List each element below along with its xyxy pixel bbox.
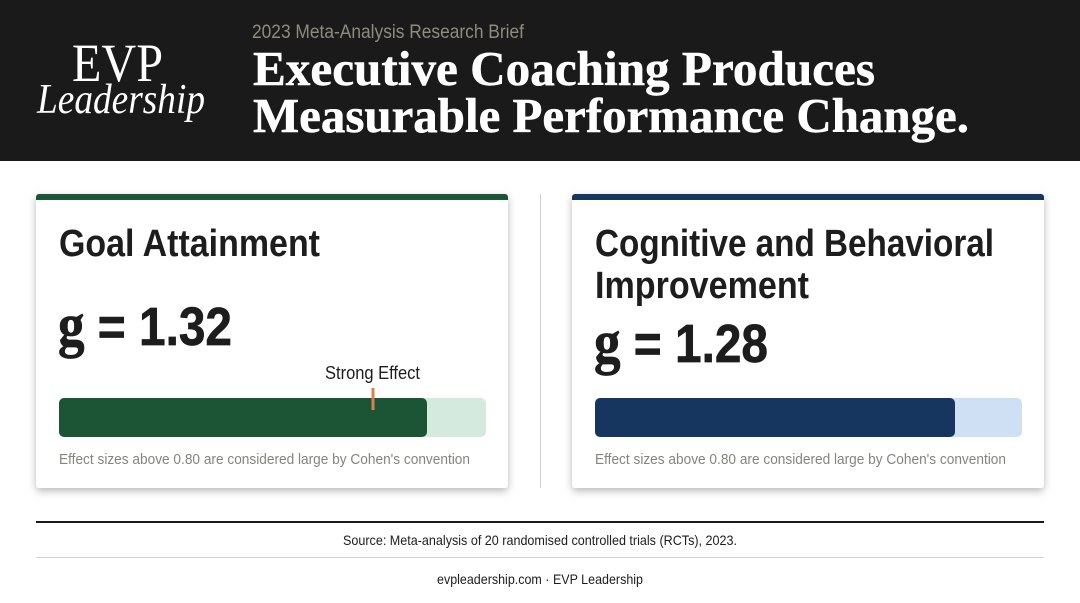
- panel heading: Cognitive and Behavioral: [595, 223, 994, 265]
- panel: cognitive and behavioral improvement: [572, 194, 1044, 488]
- footnote: Effect sizes above 0.80 are considered large by Cohen's convention: [59, 452, 470, 468]
- panel heading: Improvement: [595, 265, 809, 307]
- panel heading: Goal Attainment: [59, 223, 320, 265]
- bar chart: [59, 388, 486, 437]
- title: Executive Coaching Produces: [253, 41, 875, 96]
- footer rule: [36, 521, 1044, 523]
- bar chart: [595, 398, 1022, 437]
- strong effect marker: [372, 388, 374, 410]
- logo: Leadership: [36, 77, 205, 123]
- panel accent bar: [572, 194, 1044, 200]
- eyebrow: 2023 Meta-Analysis Research Brief: [252, 22, 525, 43]
- panel: goal attainment: [36, 194, 508, 488]
- effect size value: g = 1.28: [594, 309, 768, 375]
- panel heading: [595, 223, 994, 307]
- title: [253, 41, 969, 143]
- header band: [0, 0, 1080, 161]
- footnote: Effect sizes above 0.80 are considered large by Cohen's convention: [595, 452, 1006, 468]
- source note: Source: Meta-analysis of 20 randomised controlled trials (RCTs), 2023.: [343, 532, 737, 548]
- effect size value: g = 1.32: [58, 292, 232, 358]
- footer credit: evpleadership.com · EVP Leadership: [437, 571, 643, 587]
- logo: EVP: [72, 33, 163, 93]
- title: Measurable Performance Change.: [253, 88, 969, 143]
- divider: [540, 194, 541, 488]
- panel accent bar: [36, 194, 508, 200]
- marker label: Strong Effect: [325, 362, 420, 383]
- logo: [36, 33, 205, 123]
